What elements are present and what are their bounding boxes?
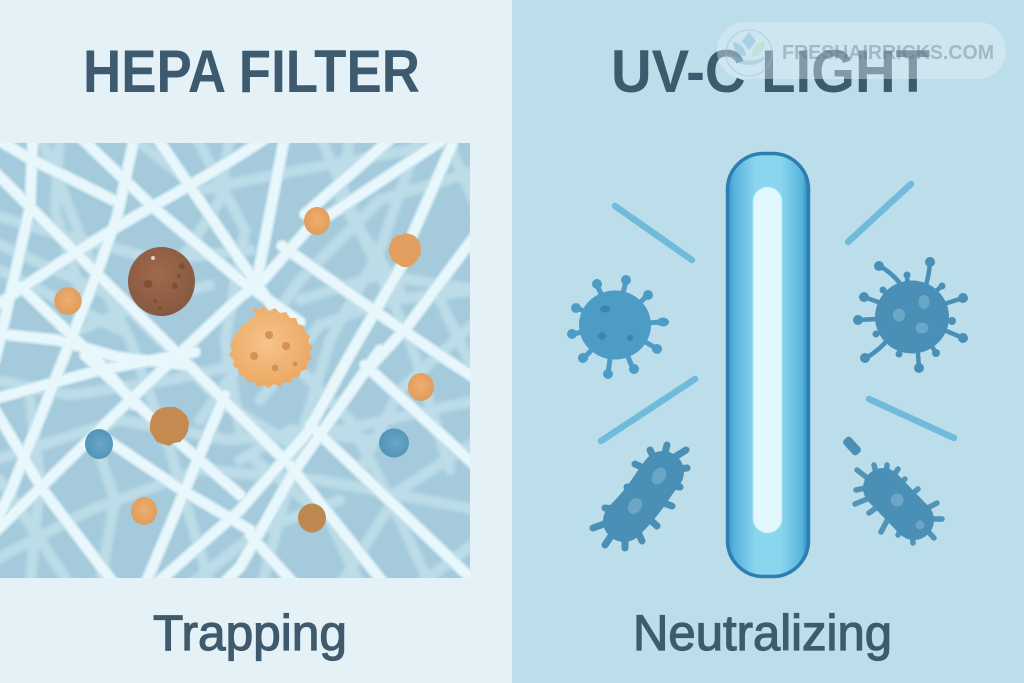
label: Neutralizing: Neutralizing: [633, 605, 892, 661]
icon: virus, upper right: [853, 257, 968, 373]
particle: small orange, right: [408, 373, 434, 401]
watermark: FRESHAIRRICKS.COM badge: [717, 22, 1006, 79]
icon: UV-C lamp tube: [728, 154, 808, 576]
particle: lumpy brown-orange, lower middle: [150, 407, 189, 446]
particle: large brown dust: [128, 247, 195, 316]
watermark: FRESHAIRRICKS.COM badge: FRESHAIRRICKS.COM: [782, 41, 994, 64]
particle: small orange, left: [54, 287, 82, 315]
icon: watermark logo: [726, 30, 772, 76]
icon: bacterium, lower left: [593, 445, 687, 548]
particle: spiky pollen grain: [229, 306, 313, 388]
label: Trapping: Trapping: [153, 605, 347, 661]
rays: UV light beams: [601, 184, 954, 441]
panel: UV-C light background: [512, 0, 1024, 683]
particle: lumpy orange, upper right: [388, 233, 421, 267]
chart: filter fibre mesh with trapped particles: [0, 135, 478, 585]
icon: virus, upper left: [567, 275, 669, 379]
panel: HEPA filter background: [0, 0, 512, 683]
icon: bacterium, lower right: [842, 435, 942, 543]
particle: small orange, upper: [304, 207, 330, 235]
heading: HEPA FILTER: HEPA FILTER: [83, 38, 420, 105]
particle: small orange, lower left: [131, 497, 157, 525]
particle: blue, right: [379, 428, 409, 458]
particle: blue, left: [85, 429, 113, 459]
heading: UV-C LIGHT: UV-C LIGHT: [611, 38, 930, 105]
fibre mesh: [0, 135, 478, 585]
particle: small brown, lower right: [298, 504, 326, 532]
